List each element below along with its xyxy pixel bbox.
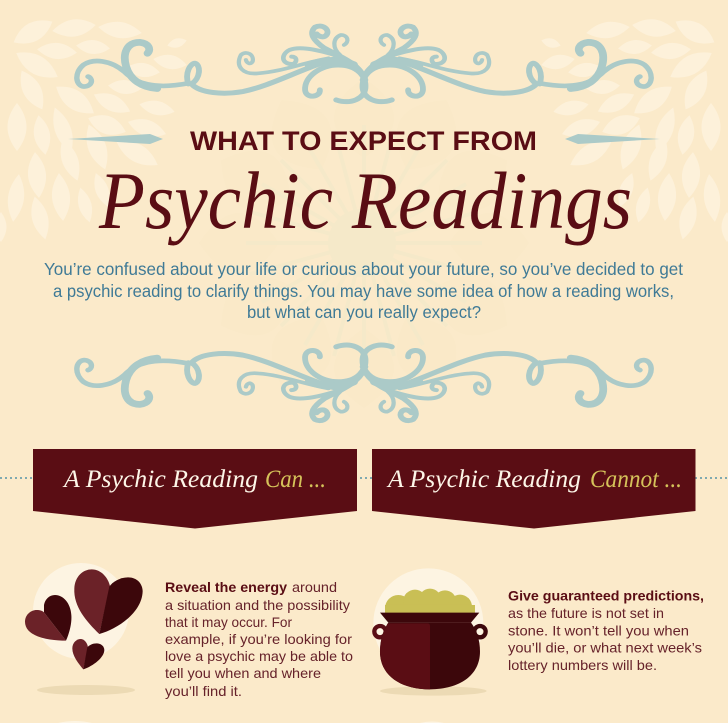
decorative leaf clusters (0, 13, 728, 242)
text block: reveal the energy: Reveal the energy (165, 579, 287, 595)
panel: cannot banner: Cannot ... (590, 466, 682, 493)
central mandala (199, 78, 529, 408)
intro text: but what can you really expect? (247, 302, 481, 322)
heading: WHAT TO EXPECT FROM (190, 126, 537, 156)
text block: guaranteed predictions: lottery numbers will be. (508, 657, 657, 673)
text block: reveal the energy: that it may occur. For (165, 614, 292, 630)
panel: can banner: A Psychic Reading (62, 466, 258, 493)
icon: pot of gold (373, 568, 487, 696)
panel: cannot banner: A Psychic Reading (386, 466, 581, 493)
icon: hearts (25, 563, 143, 695)
next row circle tops (58, 721, 444, 723)
bottom flourish (77, 345, 651, 421)
intro text: a psychic reading to clarify things. You may have some idea of how a reading works, (53, 281, 674, 301)
panel: can banner (33, 449, 357, 528)
text block: reveal the energy (165, 579, 353, 699)
text block: guaranteed predictions: you’ll die, or what next week’s (508, 640, 702, 656)
text block: reveal the energy: around (292, 579, 337, 595)
text block: guaranteed predictions: stone. It won’t tell you when (508, 622, 689, 638)
text block: guaranteed predictions: as the future is not set in (508, 605, 664, 621)
panel: can banner: Can ... (265, 466, 326, 493)
text block: reveal the energy: example, if you’re looking for (165, 631, 352, 647)
text block: reveal the energy: tell you when and where (165, 665, 321, 681)
text block: reveal the energy: you’ll find it. (165, 683, 242, 699)
left arrow ornament (68, 134, 163, 144)
text block: guaranteed predictions: Give guaranteed predictions, (508, 588, 704, 604)
intro text: You’re confused about your life or curious about your future, so you’ve decided to get (44, 259, 683, 279)
top flourish (77, 26, 651, 102)
dotted divider (0, 477, 728, 479)
right arrow ornament (565, 134, 660, 144)
text block: reveal the energy: a situation and the possibility (165, 597, 350, 613)
intro text (44, 259, 683, 322)
text block: guaranteed predictions (508, 588, 704, 673)
panel: cannot banner (372, 449, 696, 528)
text block: reveal the energy: love a psychic may be able to (165, 648, 353, 664)
script title: Psychic Readings (98, 155, 632, 246)
